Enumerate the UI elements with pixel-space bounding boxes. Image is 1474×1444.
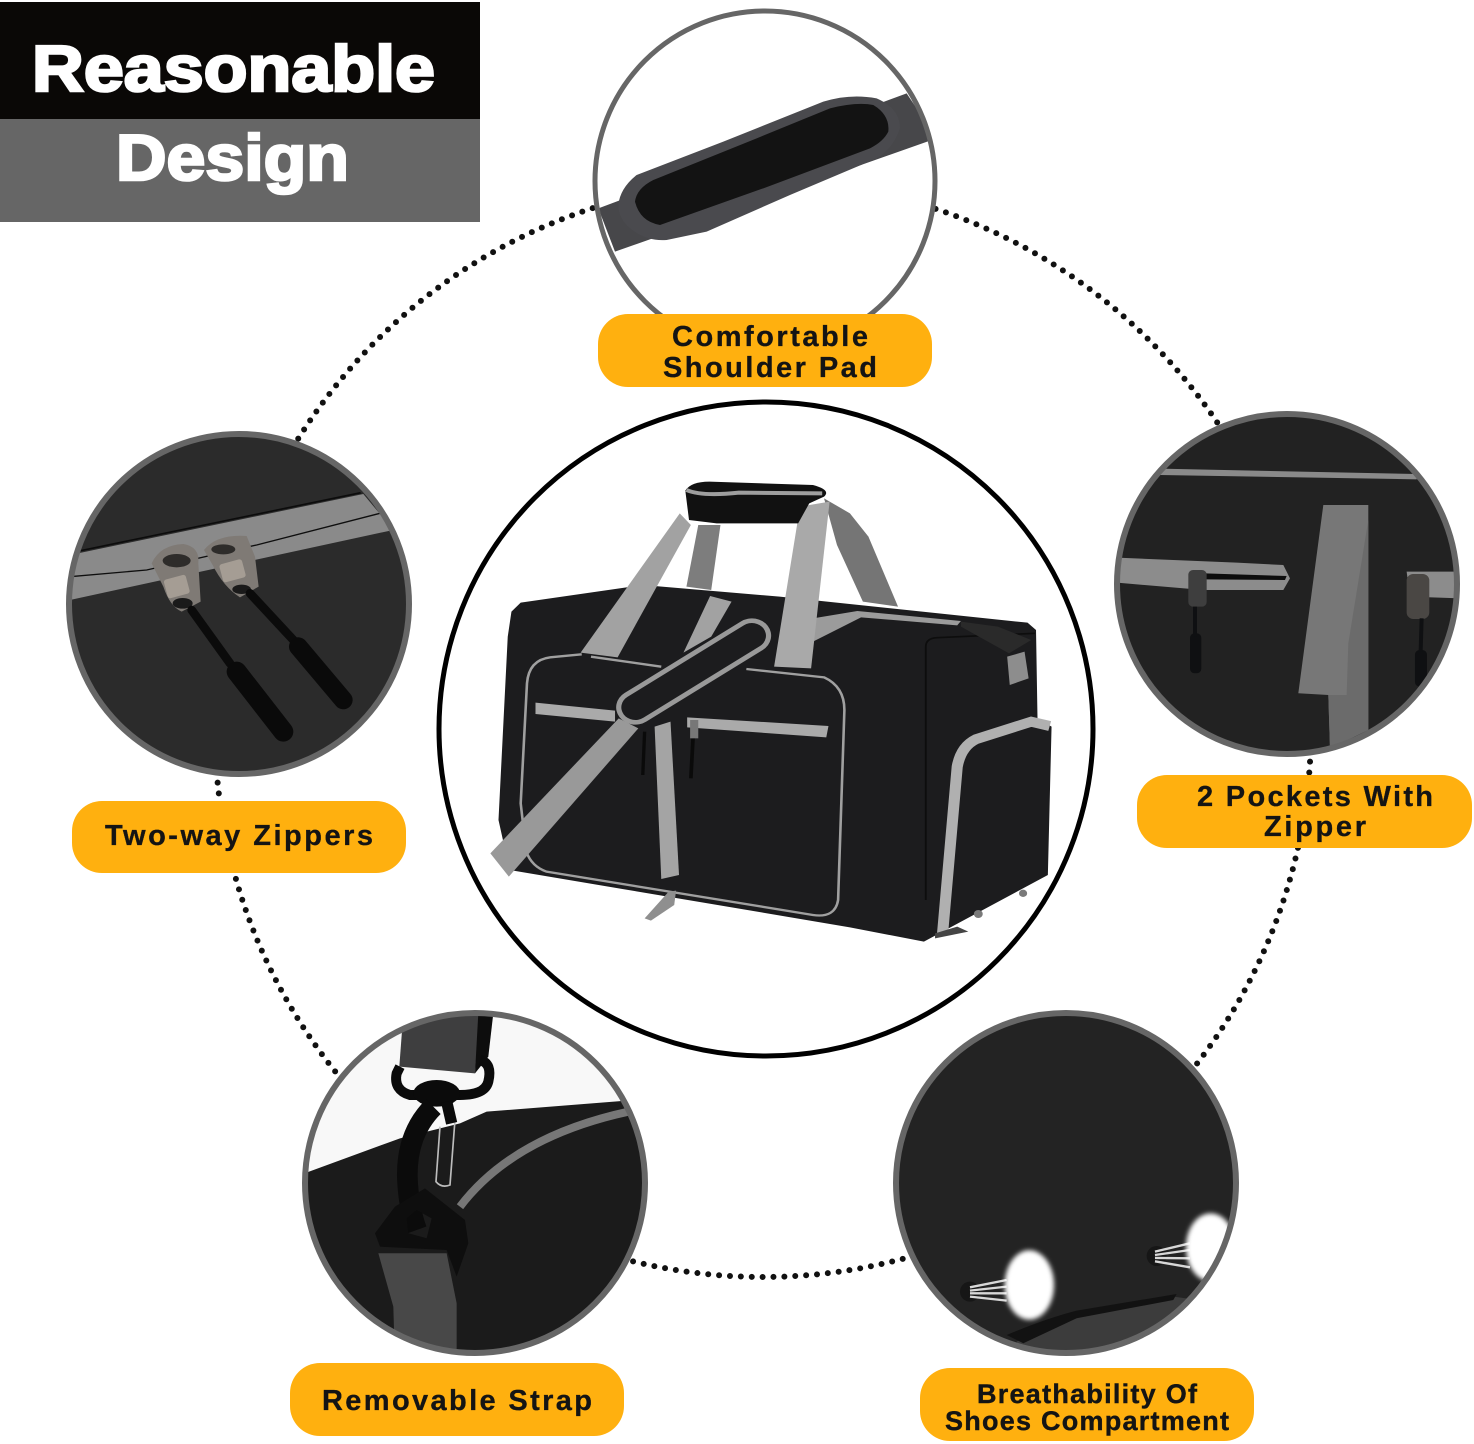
panel: central duffel bag xyxy=(439,402,1093,1056)
icon: plastic buckle xyxy=(375,1188,468,1277)
icon: zipper pulls xyxy=(192,593,343,732)
callout: removable strap: Removable Strap xyxy=(322,1385,592,1417)
icon: right zipper pull xyxy=(1407,574,1429,687)
callout: removable strap xyxy=(290,1363,624,1436)
webbing loop xyxy=(1298,505,1368,748)
title banner: Reasonable xyxy=(32,32,435,105)
pocket zippers xyxy=(535,703,828,778)
shoulder strap xyxy=(490,718,638,877)
callout: 2 pockets with zipper xyxy=(1137,775,1472,848)
back handle straps xyxy=(686,498,898,607)
panel: two-way zippers detail xyxy=(69,434,409,774)
grab handle pad xyxy=(685,482,826,523)
side panel seam xyxy=(926,633,1035,900)
icon: cotton puff left xyxy=(1005,1250,1054,1320)
callout: 2 pockets with zipper: 2 Pockets With xyxy=(1197,781,1433,813)
panel: comfortable shoulder pad detail xyxy=(595,11,937,351)
callout: two-way zippers: Two-way Zippers xyxy=(105,820,373,852)
callout: breathability of shoes compartment xyxy=(920,1368,1254,1441)
illustration: duffel bag xyxy=(490,482,1052,942)
callout: breathability of shoes compartment: Shoes Compartment xyxy=(945,1406,1229,1436)
icon: threads right xyxy=(1155,1243,1190,1267)
title banner xyxy=(0,2,480,222)
icon: pocket zipper pull xyxy=(1188,570,1207,673)
callout: comfortable shoulder pad: Comfortable xyxy=(672,321,868,353)
title banner: Design xyxy=(116,121,349,194)
icon: threads left xyxy=(970,1280,1007,1301)
bag body xyxy=(498,585,1052,942)
strap top xyxy=(399,1013,480,1073)
callout: two-way zippers xyxy=(72,801,406,873)
top zipper trim xyxy=(813,611,961,642)
panel: pockets with zipper detail xyxy=(1117,414,1460,754)
panel: removable strap detail xyxy=(300,1013,653,1363)
icon: swivel hook xyxy=(396,1060,489,1230)
vertical webbing xyxy=(655,722,679,879)
icon: zipper slider right xyxy=(204,536,259,597)
callout: breathability of shoes compartment: Breathability Of xyxy=(977,1379,1198,1409)
side zipper ends xyxy=(935,622,1031,938)
grommets xyxy=(974,890,1027,918)
front pocket trim xyxy=(521,654,844,916)
dotted connecting ring xyxy=(215,181,1311,1277)
shoulder pad xyxy=(635,636,752,707)
callout: 2 pockets with zipper: Zipper xyxy=(1264,811,1366,843)
front handle straps xyxy=(581,502,830,668)
callout: comfortable shoulder pad xyxy=(598,314,932,387)
callout: comfortable shoulder pad: Shoulder Pad xyxy=(663,352,877,384)
icon: zipper slider left xyxy=(152,544,201,612)
panel: breathable shoes compartment detail xyxy=(896,1013,1236,1363)
side pocket with zipper band xyxy=(942,722,1050,935)
bottom zipper tab xyxy=(645,891,676,921)
icon: cotton puff right xyxy=(1186,1213,1235,1281)
